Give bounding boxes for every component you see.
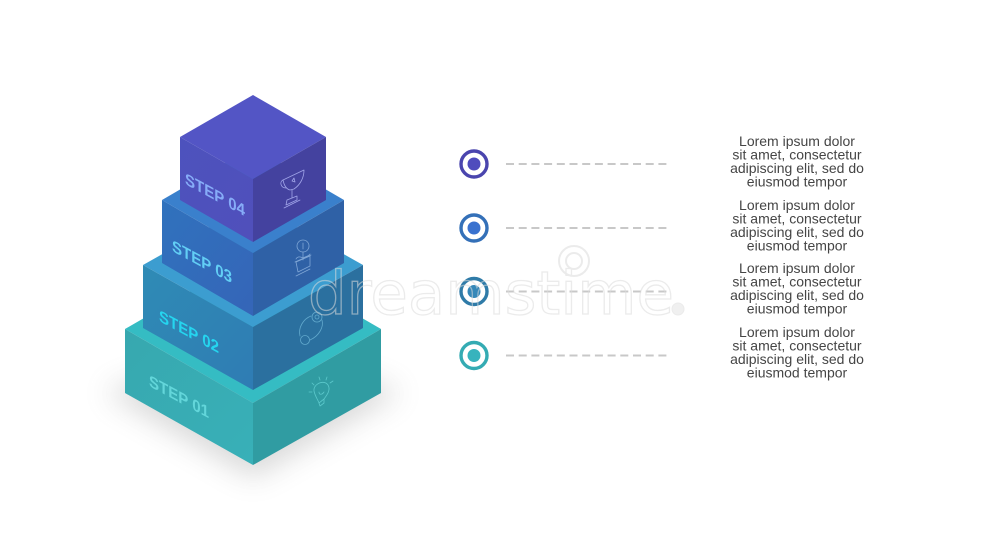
text block 3: eiusmod tempor bbox=[747, 238, 848, 254]
text block 4: Lorem ipsum dolor bbox=[739, 133, 855, 149]
step 01 block bbox=[125, 255, 381, 465]
step 04 block bbox=[180, 95, 326, 242]
marker 4 bbox=[461, 151, 487, 177]
text block 1: eiusmod tempor bbox=[747, 364, 848, 380]
step 04 top face bbox=[180, 95, 326, 179]
text block 2: Lorem ipsum dolor bbox=[739, 260, 855, 276]
step 01 top face bbox=[125, 255, 381, 403]
step 02 block bbox=[143, 203, 363, 390]
step 04 right face bbox=[253, 137, 326, 242]
text block 3: Lorem ipsum dolor bbox=[739, 197, 855, 213]
step 02 top face bbox=[143, 203, 363, 327]
text block 1: sit amet, consectetur bbox=[732, 338, 862, 354]
text block 1 bbox=[730, 324, 864, 380]
text block 3 bbox=[730, 197, 864, 254]
text block 4: eiusmod tempor bbox=[747, 174, 848, 190]
text block 1: adipiscing elit, sed do bbox=[730, 351, 864, 367]
step 02 left face bbox=[143, 265, 253, 390]
connector 3 bbox=[506, 227, 668, 229]
step 02 label: STEP 02 bbox=[159, 306, 219, 357]
step 03 label: STEP 03 bbox=[172, 236, 232, 287]
text block 4: adipiscing elit, sed do bbox=[730, 160, 864, 176]
text block 2: sit amet, consectetur bbox=[732, 274, 862, 290]
icon: plant with coin bbox=[295, 240, 311, 276]
icon: gears cycle bbox=[300, 312, 322, 344]
text block 2 bbox=[730, 260, 864, 316]
step 03 right face bbox=[253, 200, 344, 316]
icon: trophy bbox=[281, 170, 304, 208]
text block 3: adipiscing elit, sed do bbox=[730, 224, 864, 240]
text block 3: sit amet, consectetur bbox=[732, 210, 862, 226]
text block 2: adipiscing elit, sed do bbox=[730, 287, 864, 303]
connector 4 bbox=[506, 163, 668, 165]
step 03 block bbox=[162, 147, 344, 316]
step 01 label: STEP 01 bbox=[149, 371, 209, 422]
watermark: dreamstime bbox=[308, 259, 674, 329]
step 03 top face bbox=[162, 147, 344, 253]
text block 4 bbox=[730, 133, 864, 190]
connector 1 bbox=[506, 354, 668, 356]
step 02 right face bbox=[253, 265, 363, 390]
step 03 left face bbox=[162, 200, 253, 316]
marker 3 bbox=[461, 215, 487, 241]
connector 2 bbox=[506, 290, 668, 292]
text block 2: eiusmod tempor bbox=[747, 300, 848, 316]
icon: light bulb bbox=[309, 377, 333, 406]
base shadow bbox=[105, 340, 401, 478]
marker 2 bbox=[461, 278, 487, 304]
step 01 left face bbox=[125, 329, 253, 465]
step 04 left face bbox=[180, 137, 253, 242]
marker 1 bbox=[461, 342, 487, 368]
step 01 right face bbox=[253, 329, 381, 465]
step 04 label: STEP 04 bbox=[185, 169, 245, 220]
text block 1: Lorem ipsum dolor bbox=[739, 324, 855, 340]
text block 4: sit amet, consectetur bbox=[732, 146, 862, 162]
